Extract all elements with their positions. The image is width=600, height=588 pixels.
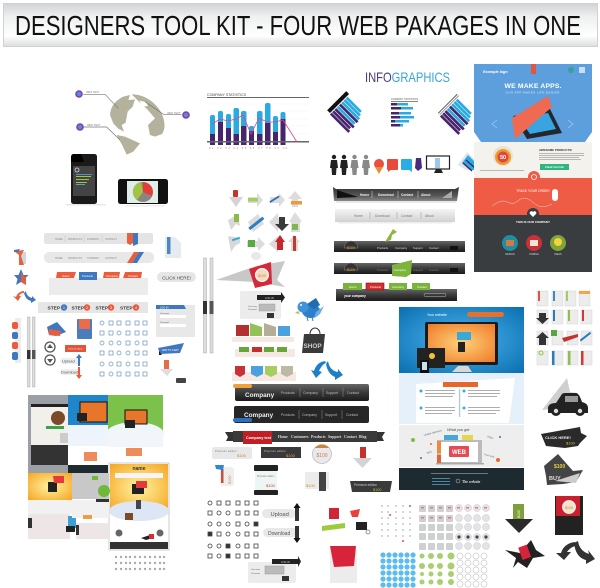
hero: we make apps <box>474 64 592 142</box>
world globe infographic: INFO TEXT <box>87 123 101 127</box>
ribbon menu with red company tab: Products <box>311 435 326 439</box>
buy badge <box>544 454 583 485</box>
grey green template <box>72 473 110 539</box>
left navigation bars: CONTACT <box>105 257 117 260</box>
steps bar: 1 <box>63 306 65 310</box>
login box <box>248 556 301 583</box>
navigation bar: green and red tabs: Company <box>392 285 405 289</box>
isometric bar chart right <box>437 94 478 135</box>
navigation bar: light: Contact <box>401 214 412 218</box>
black down arrow with green tag: $100 <box>517 510 521 518</box>
premium edition labels: Premium edition <box>215 449 237 453</box>
website features section <box>399 373 524 424</box>
company nav bar with blue tag: Company <box>244 412 274 419</box>
company nav bar with blue tag: Contact <box>346 413 358 417</box>
smartphone portrait <box>66 154 106 206</box>
orange template <box>109 463 169 550</box>
side tabs <box>12 318 21 363</box>
company nav bar with orange tag: Company <box>303 391 318 395</box>
yellow template <box>28 473 76 539</box>
coloured pennant tabs <box>232 323 294 342</box>
grey template <box>28 395 68 473</box>
login box: Password <box>251 573 260 575</box>
premium cards row: $100 <box>266 483 276 488</box>
steps bar: STEP <box>72 306 85 312</box>
company nav bar with blue tag <box>233 406 369 423</box>
what you get section: What you get <box>447 428 470 432</box>
world globe infographic <box>76 90 189 155</box>
navigation bar: green and red tabs: your company <box>344 294 366 298</box>
tabbed panel: Products <box>82 274 94 278</box>
navigation bar: green and red tabs: Contact <box>417 285 427 289</box>
steps bar: STEP <box>120 306 133 312</box>
speech bubble and shape icons <box>374 158 422 174</box>
vertical sliders left <box>27 317 36 387</box>
add to cart ribbon and small arrow: ADD TO CART <box>162 349 179 352</box>
smartphone landscape with pie chart <box>118 179 168 206</box>
small ui elements: badges and buttons: Premium edition <box>68 348 82 350</box>
infographics heading: INFOGRAPHICS <box>365 69 450 85</box>
navigation bar: dark ribbon: About <box>421 193 431 197</box>
navigation bar: dark ribbon <box>333 187 459 203</box>
navigation bar: dark with green leaf: Products <box>377 246 389 250</box>
orange template: name <box>132 466 146 472</box>
navigation bar: dark with green tab: Contact <box>429 268 439 272</box>
company section: IDEAS <box>554 253 562 256</box>
left navigation bars: PRODUCTS <box>68 257 82 260</box>
bar chart: company statistics: 01 02 03 04 05 06 07 08 09 10 <box>209 147 288 150</box>
premium cards row: $100 <box>306 483 316 488</box>
people icons <box>330 155 370 175</box>
website panel with monitor <box>399 307 524 375</box>
bar chart: company statistics: COMPANY STATISTICS <box>207 93 247 97</box>
monitor icon <box>426 156 450 173</box>
steps bar: 2 <box>86 306 88 310</box>
tabbed panel <box>49 272 148 295</box>
what you get section: Video <box>487 435 494 440</box>
company section: DESIGN <box>505 253 515 256</box>
left navigation bars: COMPANY <box>87 257 100 260</box>
document icon <box>165 237 181 258</box>
world globe infographic: INFO TEXT <box>86 90 100 94</box>
hero: we make apps: OUR APP MAKES LIFE EASIER. <box>506 90 561 94</box>
ribbon menu with red company tab <box>225 431 385 444</box>
steps bar: 4 <box>135 306 137 310</box>
hero: we make apps: WE MAKE APPS. <box>504 83 562 90</box>
company nav bar with orange tag <box>233 384 369 401</box>
login form with dark tab: Password <box>248 309 257 311</box>
dark curved arrows <box>556 541 595 564</box>
click here badge: $100 <box>566 440 576 446</box>
bar chart: company statistics <box>207 93 309 150</box>
navigation bar: dark with green leaf: Company <box>395 246 408 250</box>
what you get section: SEO <box>426 450 432 455</box>
login box: Username <box>160 313 170 315</box>
login box: Password <box>160 322 169 324</box>
blue button grid <box>380 552 416 588</box>
what you get section: Your web <box>484 453 495 459</box>
ribbon menu with red company tab: Customers <box>291 435 309 439</box>
navigation bar: dark with green leaf <box>334 229 465 252</box>
navigation bar: green and red tabs <box>336 283 457 301</box>
premium edition labels: $100 <box>237 453 247 458</box>
ribbon menu with red company tab: Home <box>278 435 288 439</box>
left navigation bars: CONTACT <box>105 238 117 241</box>
horizontal bar chart centre <box>391 98 419 126</box>
navigation bar: dark with green leaf: $100 <box>347 246 355 250</box>
premium edition labels: $100 <box>316 453 328 459</box>
website footer: The website <box>462 480 481 484</box>
login form with dark tab: LOG IN <box>265 296 274 300</box>
buy badge: $100 <box>554 464 565 470</box>
dark notebook with red band: $100 <box>565 506 573 510</box>
ribbon menu with red company tab: Blog <box>359 435 366 439</box>
navigation bar: light: Download <box>375 214 390 218</box>
navigation bar: dark with green tab: $100 <box>347 268 355 272</box>
blue template <box>68 395 108 474</box>
upload and download buttons: Download <box>268 531 290 537</box>
upload and download buttons: Upload <box>270 512 289 518</box>
small ui elements: badges and buttons: Download <box>61 370 78 374</box>
colourful ui cluster <box>322 508 370 534</box>
what you get section <box>399 425 524 467</box>
green template <box>106 395 164 456</box>
small ui elements: badges and buttons <box>45 319 92 379</box>
navigation bar: light: About <box>425 214 434 218</box>
arrow icon set <box>228 190 302 260</box>
company nav bar with blue tag: Products <box>281 413 295 417</box>
ribbon menu with red company tab: Support <box>328 435 342 439</box>
ribbon menu with red company tab: Contact <box>344 435 358 439</box>
website footer <box>399 468 524 490</box>
black icon grid <box>208 501 258 558</box>
add to cart ribbon and small arrow <box>158 343 186 383</box>
shop bag: SHOP <box>304 343 322 350</box>
hero: we make apps: Example logo <box>483 70 508 74</box>
outlined circle grid <box>457 553 487 587</box>
left navigation bars: HOME <box>55 238 63 241</box>
what you get section: WEB <box>452 450 467 456</box>
premium edition labels: $100 <box>286 453 296 458</box>
order section: TRACE YOUR ORDER <box>516 189 550 193</box>
steps bar <box>38 302 148 313</box>
navigation bar: dark with green tab: Products <box>377 268 389 272</box>
login form with dark tab <box>240 291 285 319</box>
company nav bar with orange tag: Contact <box>347 391 359 395</box>
company section <box>474 208 592 272</box>
black car with silver arrow <box>542 378 588 416</box>
blue icon grid <box>100 321 147 376</box>
world globe infographic: INFO TEXT <box>167 111 181 115</box>
click here button <box>157 272 196 282</box>
silver ribbon with red price badge <box>216 261 285 288</box>
website panel with monitor: Your website <box>427 313 447 317</box>
click here button: CLICK HERE! <box>162 276 191 280</box>
premium cards row: Premium edition <box>257 475 275 478</box>
premium cards row <box>215 465 392 495</box>
silver button grid <box>419 504 490 550</box>
dark notebook with red band <box>555 496 583 535</box>
navigation bar: green and red tabs: Products <box>370 285 382 289</box>
premium cards row: $100 <box>373 488 381 492</box>
small buttons row <box>235 347 295 357</box>
click here badge <box>541 427 587 448</box>
shield tabs <box>232 366 296 381</box>
coloured icon grid <box>381 505 411 542</box>
steps bar: STEP <box>96 306 109 312</box>
premium cards row: $100 <box>228 476 232 484</box>
silver ribbon with red price badge: $100 <box>258 274 266 278</box>
tabbed panel: Company <box>106 274 119 278</box>
icons with leaves and lists bottom <box>208 501 301 583</box>
left navigation bars: COMPANY <box>87 238 100 241</box>
vertical sliders centre <box>203 258 214 353</box>
buy badge: BUY <box>549 476 561 482</box>
horizontal bar chart centre: COMPANY STATISTICS <box>391 98 419 101</box>
company nav bar with blue tag: Support <box>325 413 337 417</box>
navigation bar: dark with green leaf: Contact <box>429 246 439 250</box>
left navigation bars: HOME <box>55 257 63 260</box>
small ui elements: badges and buttons: Upload <box>62 358 75 364</box>
login box <box>156 305 195 337</box>
left navigation bars: PRODUCTS <box>68 238 82 241</box>
what you get section: Unique elements <box>423 429 443 437</box>
blue bird <box>295 298 324 321</box>
shop bag <box>302 328 325 353</box>
navigation bar: dark ribbon: Home <box>360 193 369 197</box>
click here badge: CLICK HERE! <box>545 435 571 440</box>
curved blue arrows <box>311 361 343 380</box>
company nav bar with blue tag: Company <box>302 413 317 417</box>
down arrow with red tag <box>353 447 372 468</box>
steps bar: 3 <box>110 306 112 310</box>
products section: AWESOME PRODUCTS! <box>539 148 572 152</box>
small isometric chart fragment <box>458 152 475 171</box>
company section: CODING <box>529 253 539 256</box>
company nav bar with orange tag: Support <box>326 391 338 395</box>
navigation bar: dark with green tab: Support <box>413 268 423 272</box>
products section: 50 <box>500 155 506 161</box>
company nav bar with orange tag: Company <box>245 392 275 399</box>
landing page panel <box>474 64 592 272</box>
company nav bar with orange tag: Products <box>281 391 295 395</box>
black splat with red tag <box>505 540 545 568</box>
ribbon menu with red company tab: Company text <box>246 436 272 440</box>
company section: THIS IS OUR COMPANY <box>516 220 550 224</box>
navigation bar: dark with green tab <box>334 260 465 277</box>
upload and download buttons <box>262 503 300 543</box>
isometric bar chart left <box>326 91 368 133</box>
login box: LOG IN <box>160 306 169 310</box>
premium edition labels <box>212 444 332 464</box>
navigation bar: light: Home <box>354 214 363 218</box>
navigation bar: dark with green tab: Company <box>394 268 407 272</box>
small icon rows <box>115 556 165 570</box>
navigation bar: green and red tabs: Home <box>349 285 357 289</box>
tabbed panel: Home <box>62 274 70 278</box>
left navigation bars <box>44 233 154 263</box>
doc icons right <box>536 291 592 365</box>
website templates collage <box>28 395 169 570</box>
login box: Username <box>251 569 261 571</box>
red flag bag <box>330 546 357 583</box>
navigation bar: dark ribbon: Contact <box>401 193 414 197</box>
green eco icons <box>419 552 454 585</box>
login box: LOG IN <box>281 560 290 564</box>
steps bar: STEP <box>48 306 61 312</box>
tabbed panel: Contact <box>128 274 138 278</box>
premium edition labels: Premium edition <box>264 449 286 453</box>
navigation bar: dark with green leaf: Support <box>413 246 423 250</box>
login form with dark tab: Username <box>248 306 258 308</box>
order section <box>474 171 592 215</box>
products section <box>474 142 592 178</box>
black down arrow with green tag <box>505 504 533 533</box>
flag, star and arrow icons <box>13 249 36 303</box>
navigation bar: light <box>335 209 455 224</box>
products section: Check Your Info <box>545 166 564 169</box>
premium cards row: Premium edition <box>354 483 377 487</box>
navigation bar: dark ribbon: Download <box>378 193 394 197</box>
